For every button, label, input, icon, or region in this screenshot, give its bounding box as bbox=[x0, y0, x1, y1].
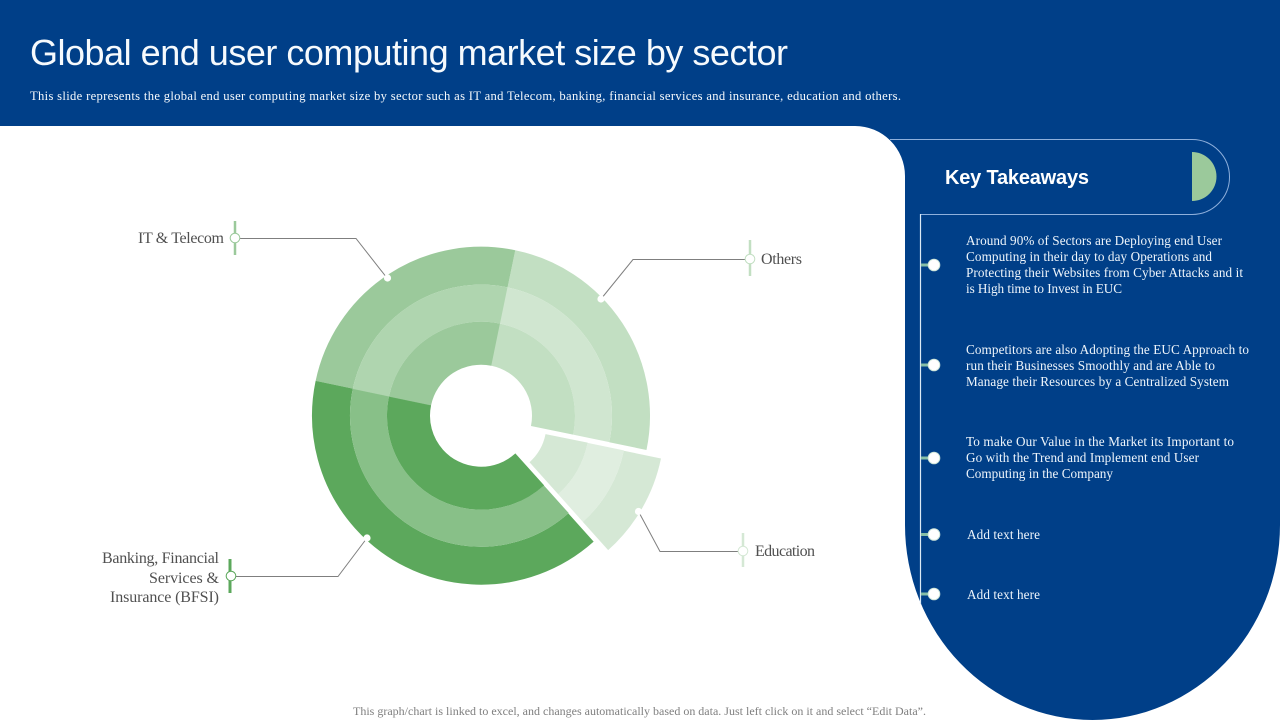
takeaway 5 bbox=[921, 587, 1040, 602]
callout: it and telecom: IT & Telecom bbox=[138, 230, 225, 247]
segment: education (exploded) bbox=[318, 247, 673, 602]
callout: banking, financial services and insurance: Services & bbox=[149, 570, 220, 587]
takeaway 1: Computing in their day to day Operations and bbox=[966, 249, 1212, 264]
takeaway 4 bbox=[921, 527, 1040, 542]
takeaway 2: run their Businesses Smoothly and are Able to bbox=[966, 358, 1215, 373]
takeaway 1: Protecting their Websites from Cyber Attacks and it bbox=[966, 265, 1243, 280]
takeaway 1: Around 90% of Sectors are Deploying end User bbox=[966, 233, 1223, 248]
takeaway 2: Competitors are also Adopting the EUC Approach to bbox=[966, 342, 1249, 357]
callout: others: Others bbox=[761, 251, 802, 268]
takeaway 3: Computing in the Company bbox=[966, 466, 1113, 481]
takeaway 1 bbox=[921, 233, 1243, 296]
callout: education: Education bbox=[755, 543, 815, 560]
takeaway 5: Add text here bbox=[967, 587, 1040, 602]
takeaway 4: Add text here bbox=[967, 527, 1040, 542]
timeline line bbox=[920, 214, 922, 604]
takeaway 3: To make Our Value in the Market its Important to bbox=[966, 434, 1234, 449]
segment: others bbox=[304, 238, 658, 593]
takeaways heading: Key Takeaways bbox=[945, 167, 1089, 189]
panel: key takeaways bbox=[855, 126, 1280, 720]
footnote: This graph/chart is linked to excel, and changes automatically based on data. Just left click on it and select “Edit Data”. bbox=[353, 704, 926, 718]
callout: it and telecom bbox=[138, 221, 391, 282]
callout: banking, financial services and insurance bbox=[102, 534, 371, 606]
callout: banking, financial services and insurance: Banking, Financial bbox=[102, 550, 220, 567]
takeaway 1: is High time to Invest in EUC bbox=[966, 281, 1122, 296]
subtitle: This slide represents the global end user computing market size by sector such as IT and Telecom, banking, financial services and insurance, education and others. bbox=[30, 89, 901, 103]
header band bbox=[0, 0, 1280, 126]
takeaway 2 bbox=[921, 342, 1249, 389]
takeaway 3 bbox=[921, 434, 1234, 481]
takeaway 2: Manage their Resources by a Centralized System bbox=[966, 374, 1230, 389]
takeaway 3: Go with the Trend and Implement end User bbox=[966, 450, 1200, 465]
segment: banking, financial services and insurance bbox=[269, 204, 693, 628]
pill outline bbox=[890, 140, 1230, 215]
callout: banking, financial services and insurance: Insurance (BFSI) bbox=[110, 589, 219, 606]
sunburst doughnut chart bbox=[269, 204, 693, 628]
segment: it and telecom bbox=[303, 238, 659, 593]
title: Global end user computing market size by sector bbox=[30, 32, 788, 73]
callout: others bbox=[597, 240, 802, 303]
icon: green half circle bbox=[1192, 152, 1216, 201]
callout: education bbox=[635, 508, 815, 567]
